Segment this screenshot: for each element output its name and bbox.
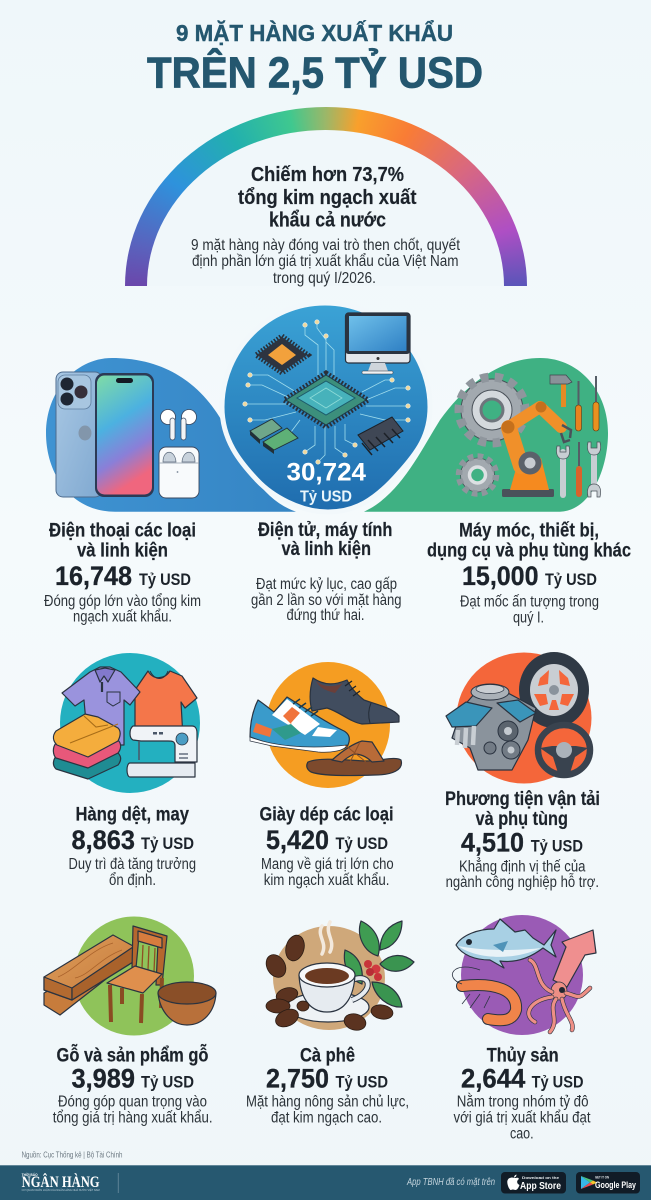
item: vehicle text: Phương tiện vận tải (445, 788, 600, 810)
item: coffee text: 2,750 (266, 1063, 329, 1093)
item: machinery text: Tỷ USD (545, 570, 597, 589)
item: coffee text: Mặt hàng nông sản chủ lực, (246, 1094, 409, 1111)
center value: 30,724 (286, 458, 366, 486)
icon: sandal (307, 741, 401, 776)
item: vehicle text: Khẳng định vị thế của (459, 858, 586, 876)
item: wood text: Gỗ và sản phẩm gỗ (56, 1042, 209, 1066)
intro heading: tổng kim ngạch xuất (238, 186, 417, 209)
item: vehicle text: Tỷ USD (531, 836, 583, 856)
icon: dress shoe (310, 678, 399, 724)
item: phones text: 16,748 (55, 561, 132, 591)
intro text (191, 163, 461, 287)
item: electronics text: đứng thứ hai. (286, 607, 364, 624)
icon: saucer (287, 992, 369, 1022)
item: machinery text: 15,000 (462, 561, 538, 591)
icon: dark microchip (358, 417, 403, 455)
panel: green machinery blob (364, 358, 608, 512)
item: footwear text: Mang về giá trị lớn cho (261, 856, 394, 873)
item: electronics text: Điện tử, máy tính (258, 519, 392, 541)
icon: fish (456, 919, 556, 968)
panel: center electronics blob (222, 303, 430, 512)
source note: Nguồn: Cục Thống kê | Bộ Tài Chính (22, 1149, 123, 1159)
center value: Tỷ USD (300, 488, 352, 506)
item: vehicle text: ngành công nghiệp hỗ trợ. (446, 874, 599, 891)
icon: small orange chip (256, 336, 308, 373)
item: coffee text: Tỷ USD (336, 1072, 388, 1091)
item: textile text: ổn định. (109, 872, 156, 889)
icon: monitor (346, 313, 410, 374)
panel: vehicle parts icon (446, 652, 592, 784)
item: textile text: Tỷ USD (141, 834, 194, 853)
icon: small gear (459, 456, 496, 494)
panel: wood icon (44, 916, 216, 1036)
title (147, 19, 483, 98)
item: seafood text: Tỷ USD (532, 1072, 584, 1091)
item: wood text: Đóng góp quan trọng vào (58, 1094, 207, 1111)
icon: robot arm (502, 402, 571, 497)
button: google play (576, 1172, 640, 1194)
center value (286, 458, 366, 506)
icon: chair (107, 926, 167, 1023)
icon: sneaker (250, 697, 349, 752)
intro heading (238, 163, 417, 232)
icon: airpods (159, 410, 199, 498)
panel: seafood icon (452, 915, 596, 1035)
item: wood text: 3,989 (72, 1063, 135, 1093)
intro heading: Chiếm hơn 73,7% (251, 163, 404, 186)
item: phones text: Điện thoại các loại (49, 520, 196, 542)
icon: phone front (95, 373, 154, 497)
icon: big gear (459, 377, 525, 443)
item: wood text: Tỷ USD (141, 1072, 194, 1091)
item: textile text: Duy trì đà tăng trưởng (68, 856, 196, 873)
item: electronics text (251, 519, 402, 624)
item: footwear text: 5,420 (266, 825, 329, 855)
intro description: định phần lớn giá trị xuất khẩu của Việt Nam (192, 253, 458, 270)
item: machinery text: quý I. (513, 610, 544, 626)
item: footwear text: Tỷ USD (336, 834, 388, 853)
icon: folded clothes (53, 714, 121, 779)
icon: engine (446, 684, 536, 770)
logo: THỜI BÁO (22, 1172, 38, 1177)
intro description (191, 237, 461, 287)
button: app store (501, 1172, 566, 1194)
item: seafood text: Thủy sản (487, 1044, 559, 1066)
button: google play: GET IT ON (595, 1176, 609, 1180)
item: seafood text: với giá trị xuất khẩu đạt (454, 1110, 591, 1127)
panel: phones blob (46, 358, 296, 512)
item: electronics text: Đạt mức kỷ lục, cao gấp (256, 576, 397, 593)
button: app store: App Store (520, 1180, 561, 1192)
icon: wooden bowl (158, 982, 216, 1025)
item: machinery text: Đạt mốc ấn tượng trong (460, 594, 599, 610)
panel: textile icon (53, 653, 200, 793)
item: footwear text (260, 804, 394, 889)
icon: tire (519, 652, 589, 728)
item: electronics text: gần 2 lần so với mặt hàng (251, 592, 402, 609)
button: app store: Download on the (522, 1175, 560, 1180)
item: coffee text (246, 1044, 409, 1127)
item: wood text (53, 1042, 213, 1127)
item: wood text: tổng giá trị hàng xuất khẩu. (53, 1110, 213, 1127)
intro description: trong quý I/2026. (273, 270, 376, 287)
icon: purple polo (62, 667, 140, 745)
title: TRÊN 2,5 TỶ USD (147, 48, 483, 98)
icon: squid (529, 930, 596, 1032)
item: phones text: ngạch xuất khẩu. (73, 608, 172, 626)
item: machinery text (427, 520, 631, 626)
item: footwear text: Giày dép các loại (260, 804, 394, 826)
intro heading: khẩu cả nước (269, 208, 386, 232)
icon: sewing machine (127, 726, 197, 777)
item: machinery text: Máy móc, thiết bị, (459, 520, 599, 542)
item: electronics text: và linh kiện (282, 538, 371, 560)
icon: steam (320, 922, 332, 954)
icon: main processor (284, 373, 368, 427)
intro description: 9 mặt hàng này đóng vai trò then chốt, quyết (191, 237, 461, 254)
icon: coffee cup (299, 963, 368, 1012)
rainbow arc (125, 107, 526, 286)
item: vehicle text: 4,510 (461, 828, 524, 858)
item: seafood text (454, 1044, 591, 1143)
item: textile text: Hàng dệt, may (76, 804, 189, 826)
footer bar (0, 1165, 651, 1200)
icon: shrimp (452, 967, 516, 1020)
item: coffee text: đạt kim ngạch cao. (271, 1110, 382, 1127)
app tagline: App TBNH đã có mặt trên (406, 1177, 495, 1188)
icon: wood planks (44, 935, 133, 1015)
icon: phone back (56, 372, 102, 497)
icon: steering wheel (538, 725, 590, 775)
icon: coffee leaves (344, 921, 414, 1007)
item: textile text: 8,863 (72, 825, 135, 855)
circuit traces (243, 320, 410, 464)
title: 9 MẶT HÀNG XUẤT KHẨU (176, 19, 453, 46)
icon: orange t-shirt (135, 671, 197, 738)
logo: CƠ QUAN NGÔN LUẬN CỦA NGÂN HÀNG NHÀ NƯỚC VIỆT NAM (22, 1187, 100, 1192)
item: seafood text: 2,644 (461, 1063, 525, 1093)
icon: memory modules (250, 419, 298, 454)
logo: NGÂN HÀNG (22, 1174, 100, 1191)
item: textile text (68, 804, 196, 889)
item: phones text: Đóng góp lớn vào tổng kim (44, 593, 201, 610)
panel: coffee icon (262, 921, 414, 1033)
item: seafood text: Nằm trong nhóm tỷ đô (457, 1094, 588, 1111)
item: phones text: Tỷ USD (139, 570, 191, 589)
panel: footwear icon (250, 662, 401, 788)
item: seafood text: cao. (510, 1126, 534, 1143)
icon: hand tools (550, 375, 601, 497)
item: phones text (44, 520, 201, 626)
item: phones text: và linh kiện (77, 540, 168, 562)
item: vehicle text: và phụ tùng (476, 808, 568, 830)
item: coffee text: Cà phê (300, 1044, 355, 1066)
button: google play: Google Play (595, 1180, 637, 1191)
item: vehicle text (445, 788, 600, 891)
item: footwear text: kim ngạch xuất khẩu. (264, 872, 390, 889)
icon: coffee beans (262, 933, 394, 1033)
